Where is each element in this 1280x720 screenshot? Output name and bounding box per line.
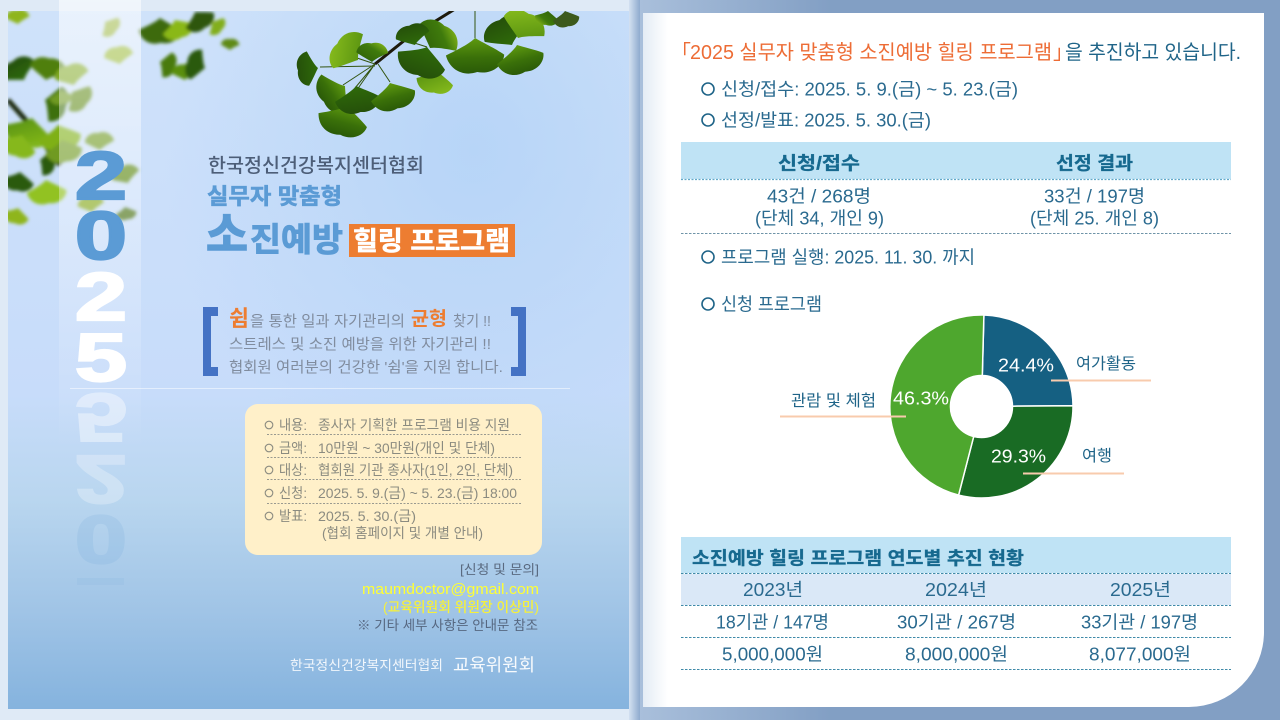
right page background: [640, 0, 1280, 720]
program info box: (협회 홈페이지 및 개별 안내): [322, 525, 483, 541]
table: yearly progress: 2024년: [925, 580, 987, 600]
callout: leisure: [1051, 355, 1151, 380]
vertical year 2025 with reflection: 5: [75, 320, 127, 396]
slogan text: 쉼: [229, 306, 249, 331]
program info box: 금액:: [279, 440, 307, 456]
callout: sightseeing and experience: 관람 및 체험: [791, 392, 876, 410]
program info box: 2025. 5. 30.(금): [318, 508, 416, 524]
orange badge: healing program: 힐링 프로그램: [353, 226, 510, 256]
vertical year 2025 with reflection: 2: [75, 138, 127, 214]
table: yearly progress: [681, 537, 1231, 670]
slogan text: 스트레스 및 소진 예방을 위한 자기관리 !!: [229, 336, 491, 353]
main title: 진예방: [250, 221, 343, 258]
table: yearly progress: 33기관 / 197명: [1081, 612, 1198, 632]
table: application and selection results: 선정 결과: [1056, 154, 1133, 174]
schedule: application: 신청/접수: 2025. 5. 9.(금) ~ 5. 23.(금): [721, 80, 1018, 100]
donut chart: 46.3%: [893, 388, 949, 408]
translucent vertical strip: [59, 0, 141, 450]
right white panel: [643, 13, 1264, 707]
schedule: announcement: 선정/발표: 2025. 5. 30.(금): [721, 110, 931, 130]
slogan text: 협회원 여러분의 건강한 '쉼'을 지원 합니다.: [229, 359, 503, 376]
program info box: [245, 404, 542, 555]
right heading: 「: [671, 41, 691, 64]
callout: travel: 여행: [1082, 447, 1112, 465]
left bracket: [203, 307, 218, 376]
contact block: [357, 562, 539, 633]
table: application and selection results: 33건 / 197명: [1044, 186, 1145, 206]
contact block: ※ 기타 세부 사항은 안내문 참조: [357, 618, 538, 633]
program info box: 내용:: [279, 417, 307, 433]
program info box: 10만원 ~ 30만원(개인 및 단체): [318, 440, 495, 456]
left page background: [0, 0, 640, 720]
callout: leisure: 여가활동: [1076, 355, 1136, 373]
callout: travel: [1023, 447, 1124, 474]
slogan text: [229, 306, 503, 376]
main title: [206, 209, 343, 261]
reflection fragment of digit 2: [77, 578, 124, 585]
slogan text: 균형: [411, 308, 447, 330]
organisation name: 한국정신건강복지센터협회: [208, 155, 424, 177]
right heading: 을 추진하고 있습니다.: [1065, 41, 1241, 64]
right heading: 」: [1053, 42, 1073, 64]
slogan text: 찾기 !!: [453, 313, 491, 330]
right bracket: [511, 307, 526, 376]
table: yearly progress: 8,077,000원: [1089, 644, 1191, 664]
table: application and selection results: [681, 142, 1231, 234]
program info box: 종사자 기획한 프로그램 비용 지원: [318, 417, 510, 433]
vertical year 2025 with reflection: 5: [75, 379, 127, 455]
footer organisation: 교육위원회: [453, 655, 535, 675]
vertical year 2025 with reflection: 0: [75, 501, 127, 577]
table: yearly progress: 30기관 / 267명: [897, 612, 1016, 632]
ginkgo branch with leaves, top centre: [296, 4, 581, 142]
donut chart: [890, 315, 1073, 498]
table: application and selection results: 신청/접수: [778, 154, 860, 174]
right heading: 2025 실무자 맞춤형 소진예방 힐링 프로그램: [690, 41, 1052, 64]
table: yearly progress: 2025년: [1110, 580, 1171, 600]
vertical year 2025 with reflection: [75, 138, 127, 577]
table: yearly progress: 5,000,000원: [722, 644, 823, 664]
subtitle: 실무자 맞춤형: [207, 184, 342, 209]
program info box: 협회원 기관 종사자(1인, 2인, 단체): [318, 462, 513, 478]
table: application and selection results: (단체 25. 개인 8): [1030, 208, 1159, 228]
blurred ginkgo leaves, top left: [0, 4, 239, 227]
vertical year 2025 with reflection: 2: [75, 259, 127, 335]
program info box: 2025. 5. 9.(금) ~ 5. 23.(금) 18:00: [318, 485, 517, 501]
sky photo panel: [8, 11, 629, 709]
callout: sightseeing and experience: [780, 392, 906, 416]
donut chart: 24.4%: [998, 356, 1054, 376]
right heading: [671, 41, 1241, 64]
program info box: 대상:: [279, 462, 307, 478]
contact block: maumdoctor@gmail.com: [362, 581, 539, 598]
table: application and selection results: 43건 / 268명: [767, 186, 871, 206]
vertical year 2025 with reflection: 2: [75, 441, 127, 517]
table: yearly progress: 소진예방 힐링 프로그램 연도별 추진 현황: [692, 548, 1024, 568]
contact block: (교육위원회 위원장 이상민): [383, 599, 539, 615]
contact block: [신청 및 문의]: [460, 562, 539, 577]
schedule: execution: 프로그램 실행: 2025. 11. 30. 까지: [721, 248, 975, 268]
main title: 소: [206, 209, 248, 261]
section label: applied programs: 신청 프로그램: [721, 294, 822, 314]
program info box: 신청:: [279, 485, 307, 501]
table: yearly progress: 2023년: [743, 580, 803, 600]
donut chart: 29.3%: [991, 446, 1046, 466]
table: yearly progress: 8,000,000원: [905, 644, 1008, 664]
slogan text: 을 통한 일과 자기관리의: [250, 313, 405, 330]
program info box: 발표:: [279, 508, 307, 524]
footer organisation: [290, 655, 535, 675]
table: yearly progress: 18기관 / 147명: [716, 612, 829, 632]
vertical year 2025 with reflection: 0: [75, 198, 127, 274]
book gutter: [629, 0, 640, 720]
footer organisation: 한국정신건강복지센터협회: [290, 658, 443, 673]
table: application and selection results: (단체 34, 개인 9): [755, 208, 884, 228]
